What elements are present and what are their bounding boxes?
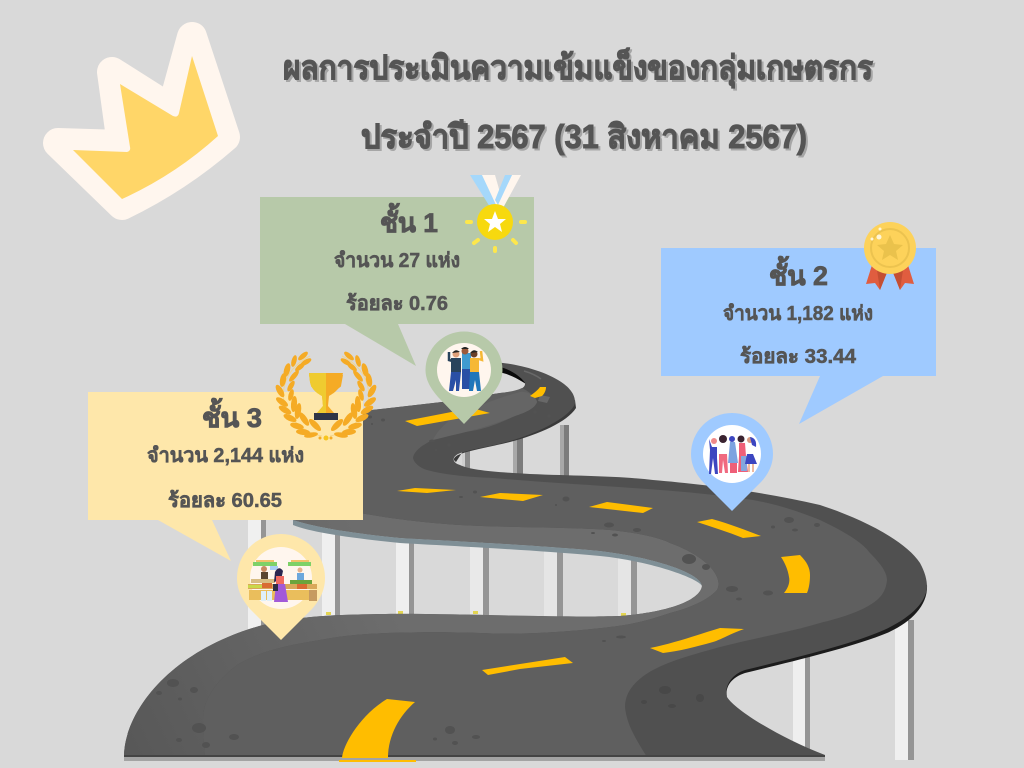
tier 1 count: จำนวน 27 แห่ง: [334, 250, 460, 272]
icon: gold medal: [864, 222, 916, 290]
pin: tier 2 women group: [691, 413, 773, 511]
pin: tier 3 market stall: [237, 534, 325, 640]
title: ประจำปี 2567 (31 สิงหาคม 2567): [361, 118, 807, 155]
tier 2 count: จำนวน 1,182 แห่ง: [723, 303, 873, 325]
tier 1 heading: ชั้น 1: [380, 202, 438, 238]
people illustration, tier 1: [449, 347, 482, 391]
title: ผลการประเมินความเข้มแข็งของกลุ่มเกษตรกร: [283, 47, 873, 89]
road centre dashes: [339, 387, 810, 762]
road: [124, 362, 927, 761]
people illustration, tier 2: [709, 435, 757, 474]
icon: medal with ribbon: [467, 175, 525, 251]
tier 2 heading: ชั้น 2: [769, 255, 828, 291]
icon: crown: [58, 37, 225, 205]
tier 3 count: จำนวน 2,144 แห่ง: [147, 445, 304, 467]
market illustration: [248, 560, 317, 602]
road surface spots: [156, 410, 820, 748]
title: [283, 47, 873, 155]
road lower edge: [293, 520, 702, 586]
icon: trophy with laurels: [274, 350, 378, 440]
panel: tier 1 callout: [260, 197, 534, 366]
road surface: [203, 388, 887, 757]
road shoulder: [124, 490, 718, 757]
road supports: [248, 425, 914, 760]
panel: tier 2 callout: [661, 248, 936, 424]
pin: tier 1 farmers group: [426, 332, 502, 424]
tier 3 percent: ร้อยละ 60.65: [168, 489, 282, 512]
tier 3 heading: ชั้น 3: [202, 397, 262, 433]
tier 2 percent: ร้อยละ 33.44: [740, 345, 857, 368]
panel: tier 3 callout: [88, 392, 363, 561]
tier 1 percent: ร้อยละ 0.76: [346, 292, 448, 315]
